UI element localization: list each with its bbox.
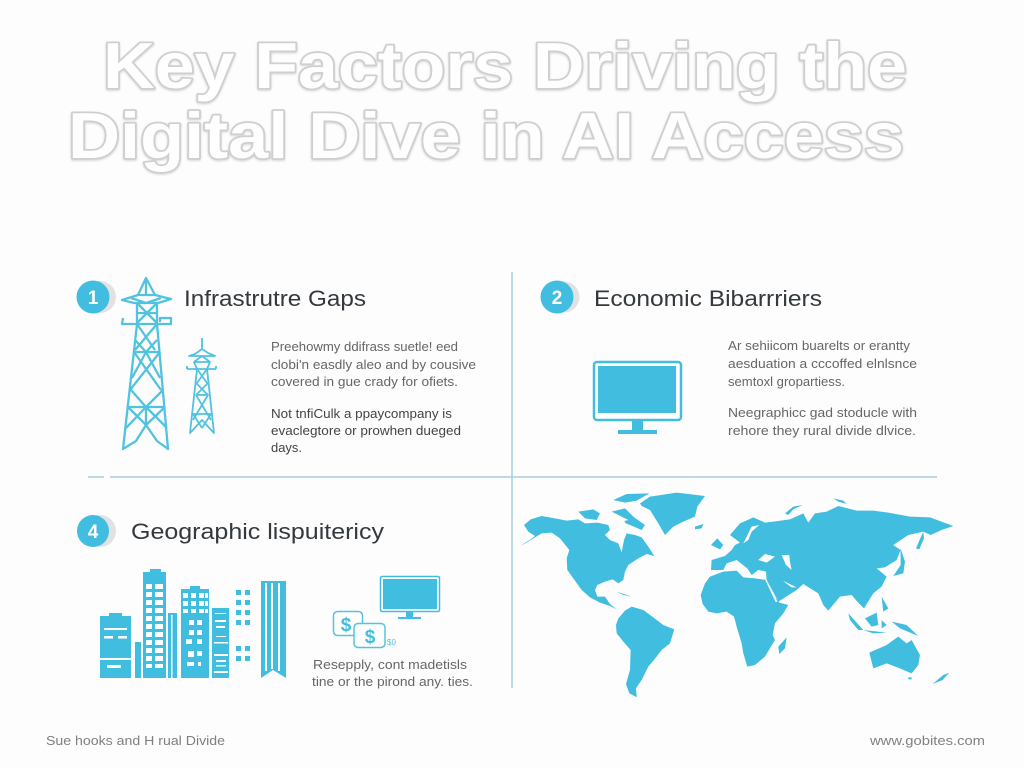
text block: geographic description: tine or the pirond any. ties. [312, 675, 473, 689]
icon: desktop monitor [594, 362, 681, 434]
badge: number 1: 1 [88, 288, 99, 309]
footer: website: www.gobites.com [869, 733, 985, 748]
text block: economic description: rehore they rural divide dlvice. [728, 424, 916, 438]
text block: economic description: semtoxl gropartiess. [728, 375, 845, 389]
text block: infrastructure description: Not tnfiCulk a ppaycompany is [271, 407, 452, 421]
text block: infrastructure description: evaclegtore or prowhen dueged [271, 424, 461, 438]
madagascar [778, 637, 787, 654]
heading: economic barriers: Economic Bibarrriers [594, 286, 822, 311]
greenland [640, 493, 705, 535]
sea cut-outs [619, 520, 797, 602]
new zealand [908, 673, 949, 684]
icon: monitor and money: $ [365, 627, 376, 648]
text block: economic description: Neegraphicc gad stoducle with [728, 406, 917, 420]
heading: geographic disparity: Geographic lispuitericy [131, 519, 384, 544]
text block: infrastructure description: clobi'n easdly aleo and by cousive [271, 358, 476, 372]
panel: geographic disparity [77, 515, 473, 689]
australia [869, 637, 920, 673]
badge: number 2: 2 [552, 288, 562, 309]
title: Digital Dive in AI Access [68, 99, 904, 172]
south america [616, 607, 674, 697]
icon: small transmission tower [187, 338, 216, 433]
text block: economic description: aesduation a cccoffed elnlsnce [728, 357, 917, 371]
uk [711, 538, 723, 549]
icon: city skyline [100, 569, 286, 678]
title [68, 29, 907, 172]
panel: infrastructure gaps [76, 278, 476, 455]
panel: economic barriers [540, 280, 917, 438]
caribbean [617, 592, 632, 597]
heading: infrastructure gaps: Infrastrutre Gaps [184, 286, 366, 311]
badge: number 2 [540, 280, 580, 314]
eurasia [711, 506, 953, 611]
text block: infrastructure description: Preehowmy ddifrass suetle! eed [271, 340, 458, 354]
japan [893, 532, 924, 576]
badge: number 4: 4 [88, 522, 99, 543]
text block: infrastructure description [271, 340, 476, 455]
text block: economic description [728, 339, 917, 438]
text block: infrastructure description: covered in gue crady for ofiets. [271, 375, 458, 389]
text block: geographic description: Resepply, cont madetisls [313, 658, 467, 672]
badge: number 1 [76, 280, 116, 314]
world map [520, 493, 953, 697]
footer: left caption: Sue hooks and H rual Divide [46, 733, 225, 748]
indonesia and philippines [848, 597, 918, 636]
title: Key Factors Driving the [103, 29, 907, 102]
badge: number 4 [77, 515, 116, 547]
icon: monitor and money [334, 576, 440, 648]
africa [701, 571, 788, 667]
arctic islands [578, 493, 847, 530]
text block: economic description: Ar sehiicom buarelts or erantty [728, 339, 911, 353]
icon: monitor and money: $0 [387, 638, 396, 647]
icon: monitor and money: $ [341, 615, 352, 636]
north america [520, 516, 654, 609]
text block: geographic description [312, 658, 473, 689]
icon: large transmission tower [122, 278, 171, 449]
text block: infrastructure description: days. [271, 441, 302, 455]
